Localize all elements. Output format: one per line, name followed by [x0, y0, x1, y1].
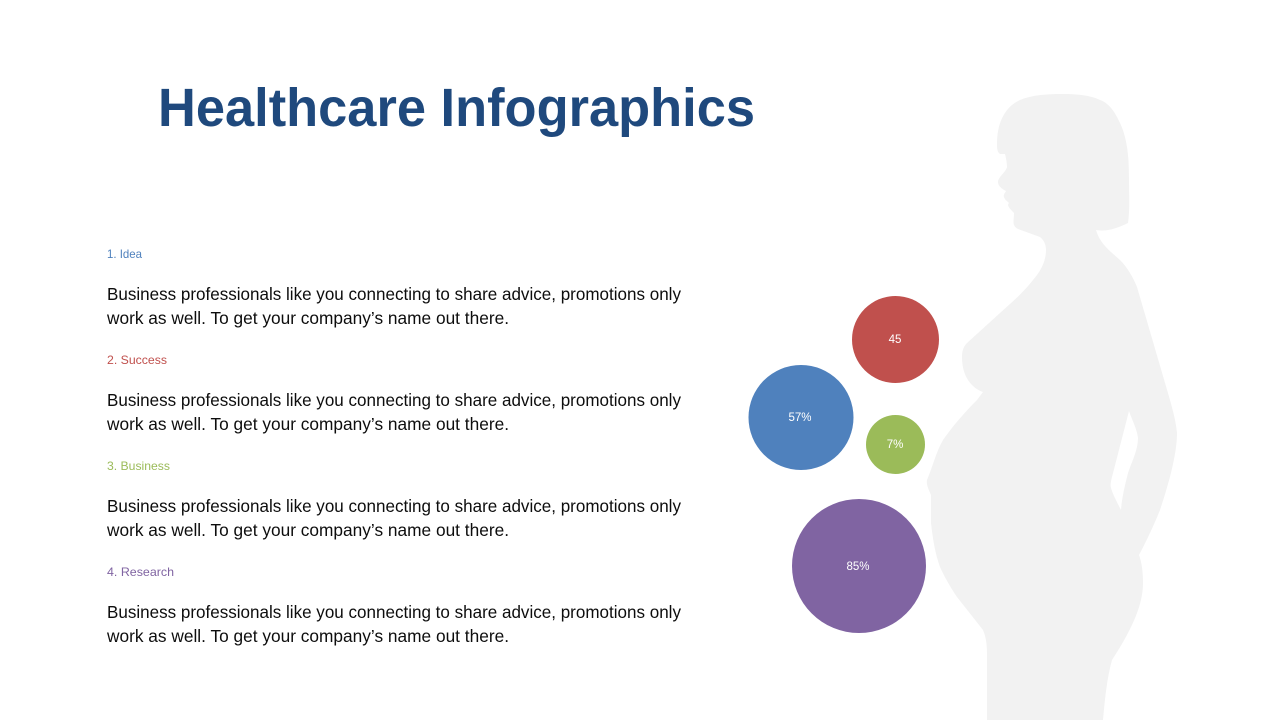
section 1: Idea	[106, 247, 681, 328]
body text: Research: Business professionals like you connecting to share advice, promotions only	[107, 602, 681, 622]
body text: Success: Business professionals like you connecting to share advice, promotions only	[107, 390, 681, 410]
bubble: 7%: 7%	[887, 439, 903, 451]
label: Success: 2. Success	[107, 353, 167, 367]
bubble: 7%	[866, 415, 925, 474]
body text: Research: work as well. To get your company’s name out there.	[106, 626, 509, 646]
label: Idea: 1. Idea	[107, 247, 142, 261]
body text: Business: work as well. To get your company’s name out there.	[106, 520, 509, 540]
section 3: Business	[106, 459, 681, 540]
label: Business: 3. Business	[107, 459, 170, 473]
bubble: 85%: 85%	[846, 561, 870, 573]
silhouette: pregnant woman	[927, 94, 1177, 720]
body text: Idea: Business professionals like you connecting to share advice, promotions only	[107, 284, 681, 304]
section 4: Research	[106, 565, 681, 646]
bubble: 57%: 57%	[788, 412, 812, 424]
bubble: 45: 45	[889, 334, 901, 346]
body text: Idea: work as well. To get your company’s name out there.	[106, 308, 509, 328]
bubble: 57%	[748, 365, 854, 470]
bubble: 45	[852, 296, 939, 383]
title: Healthcare Infographics	[158, 78, 755, 138]
body text: Success: work as well. To get your company’s name out there.	[106, 414, 509, 434]
body text: Research	[106, 602, 681, 646]
body text: Business	[106, 496, 681, 540]
section 2: Success	[106, 353, 681, 434]
body text: Business: Business professionals like you connecting to share advice, promotions only	[107, 496, 681, 516]
body text: Success	[106, 390, 681, 434]
body text: Idea	[106, 284, 681, 328]
label: Research: 4. Research	[107, 565, 174, 579]
bubble: 85%	[792, 499, 926, 633]
